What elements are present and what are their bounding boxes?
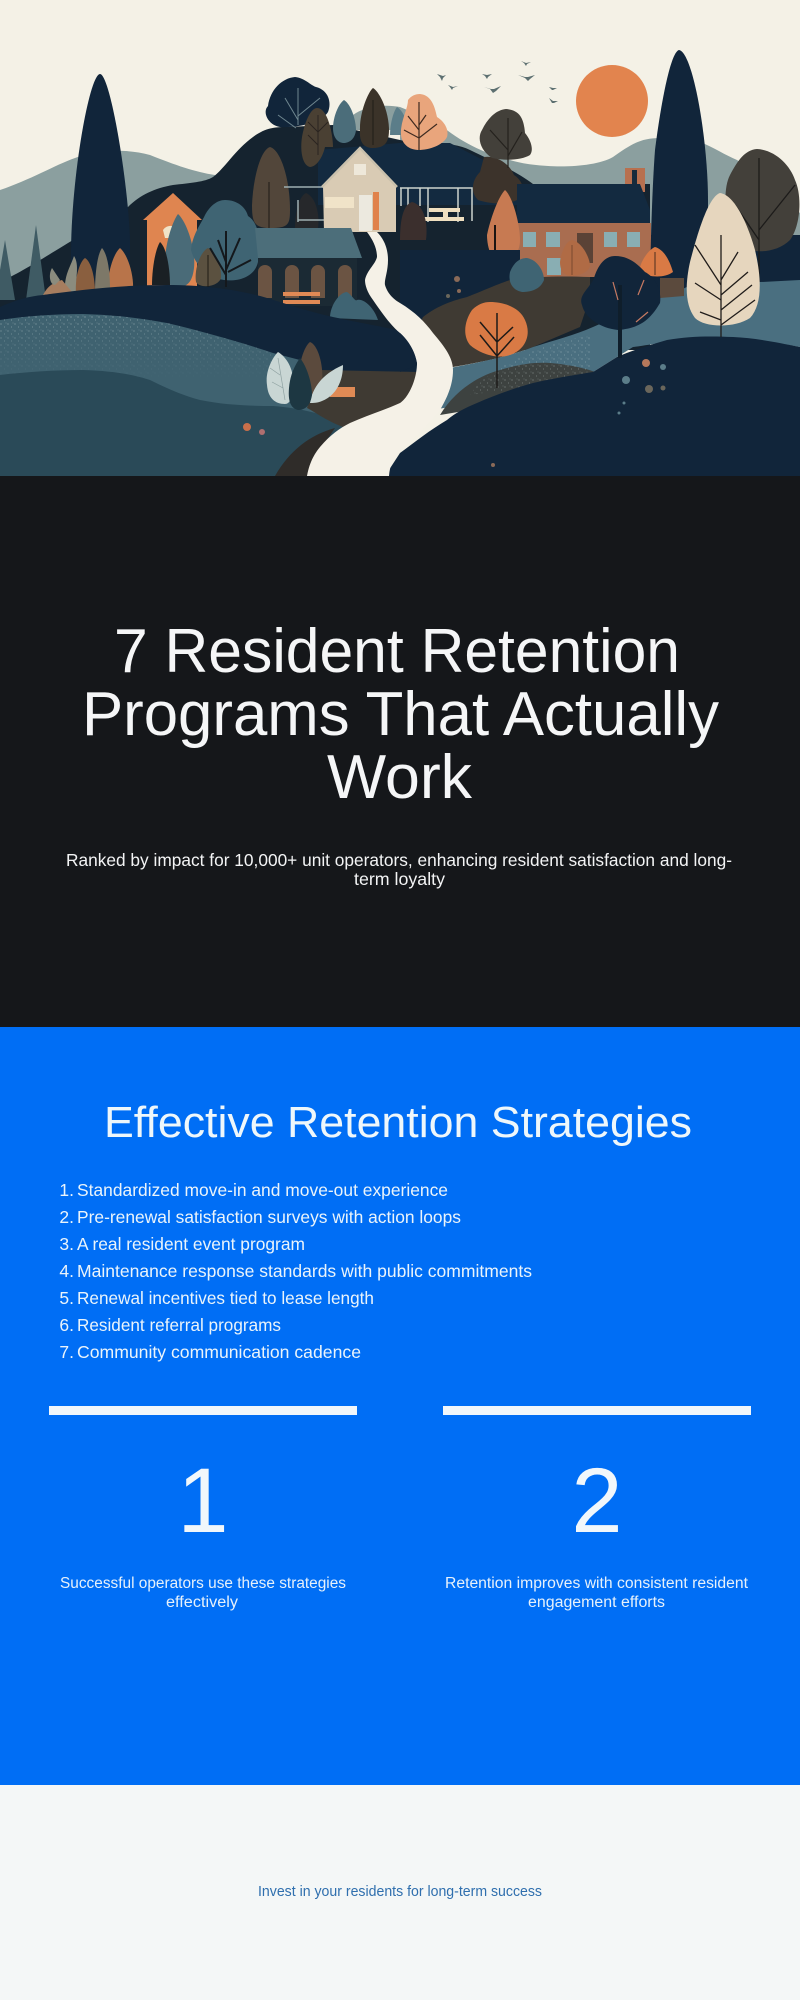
distant hills bbox=[0, 106, 800, 300]
inner dark pocket bbox=[400, 333, 417, 372]
bench orange bbox=[283, 292, 320, 304]
row of autumn trees bbox=[43, 248, 133, 295]
right cypress bbox=[650, 50, 708, 300]
speckled brown band bbox=[440, 363, 595, 415]
back roof bbox=[318, 143, 520, 205]
stat card 1 bbox=[49, 1406, 357, 1611]
stat card 2 bbox=[443, 1406, 751, 1611]
numbered list: 3. bbox=[59, 1234, 74, 1254]
brown bank bbox=[307, 370, 420, 427]
numbered list: 5. bbox=[59, 1288, 74, 1308]
cabin tree dark bbox=[152, 242, 170, 285]
teal roof building bbox=[255, 228, 362, 306]
tree: dark round bbox=[266, 77, 330, 128]
tree: far teal bbox=[390, 107, 408, 135]
numbered list bbox=[59, 1180, 532, 1362]
tree: dark blob below bbox=[473, 157, 523, 204]
stat caption 2 bbox=[445, 1575, 749, 1611]
orange cabin bbox=[143, 193, 202, 290]
subtitle bbox=[66, 850, 732, 889]
bare black tree bbox=[210, 231, 251, 287]
title: 7 Resident Retention bbox=[114, 617, 680, 686]
title bbox=[82, 617, 719, 812]
tree: brown leaf bbox=[301, 108, 333, 167]
plant: pale right leaf bbox=[310, 365, 343, 403]
panel: hero illustration bbox=[0, 0, 800, 476]
dark main hill bbox=[0, 125, 650, 350]
cabin tree teal bbox=[165, 214, 194, 287]
tree: tall brown bbox=[252, 147, 290, 228]
stat caption 2: engagement efforts bbox=[528, 1594, 665, 1611]
orange triangle tree bbox=[487, 190, 520, 280]
house bbox=[322, 148, 397, 232]
brown small tree bbox=[196, 248, 221, 288]
building roof and chimney bbox=[517, 168, 650, 224]
inner brown pocket bbox=[400, 373, 415, 402]
tree: cream bbox=[687, 193, 760, 337]
heading: Effective Retention Strategies bbox=[104, 1098, 692, 1147]
small teal shrub bbox=[510, 258, 544, 292]
numbered list: Maintenance response standards with public commitments bbox=[77, 1261, 532, 1281]
plant: dark leaf bbox=[289, 358, 312, 410]
right navy area beside path bbox=[400, 300, 460, 345]
dark foreground band bbox=[0, 285, 420, 372]
tree: dark brown leaf bbox=[360, 88, 389, 148]
right ground bbox=[650, 235, 800, 305]
tree: dark round foreground bbox=[581, 256, 660, 358]
bench on porch bbox=[424, 208, 464, 221]
panel: effective retention strategies bbox=[0, 1027, 800, 1785]
numbered list: 6. bbox=[59, 1315, 74, 1335]
footer text: Invest in your residents for long-term success bbox=[258, 1884, 542, 1900]
teal band right bbox=[430, 280, 800, 410]
left cypress bbox=[71, 74, 130, 300]
big round teal tree bbox=[191, 200, 260, 280]
background bbox=[0, 476, 800, 1027]
mid teal hill bbox=[0, 314, 320, 476]
numbered list: 7. bbox=[59, 1342, 74, 1362]
panel: footer bbox=[258, 1884, 542, 1900]
stat number 2: 2 bbox=[571, 1450, 623, 1552]
stat caption 1: effectively bbox=[166, 1594, 238, 1611]
peach tree bbox=[401, 94, 448, 150]
small dark-red tree bbox=[400, 202, 427, 240]
subtitle: term loyalty bbox=[354, 869, 445, 889]
numbered list: Standardized move-in and move-out experience bbox=[77, 1180, 448, 1200]
numbered list: 2. bbox=[59, 1207, 74, 1227]
numbered list: Community communication cadence bbox=[77, 1342, 361, 1362]
tree: right dark brown bbox=[725, 149, 799, 290]
plant: brown leaf bbox=[298, 342, 322, 398]
panel: dark title section bbox=[0, 476, 800, 1027]
small dark tree by house bbox=[295, 193, 318, 228]
far left conifers bbox=[0, 225, 46, 300]
numbered list: 4. bbox=[59, 1261, 74, 1281]
sun bbox=[576, 65, 648, 137]
numbered list: Resident referral programs bbox=[77, 1315, 281, 1335]
navy area under buildings bbox=[400, 250, 520, 317]
numbered list: A real resident event program bbox=[77, 1234, 305, 1254]
dark brown speckle patch bbox=[275, 428, 335, 476]
bottom navy hill bbox=[385, 336, 800, 476]
winding path bbox=[307, 232, 453, 476]
stat caption 1: Successful operators use these strategies bbox=[60, 1575, 346, 1592]
orange-brown leaf tree bbox=[560, 240, 590, 276]
stat caption 1 bbox=[60, 1575, 346, 1611]
title: Work bbox=[327, 743, 473, 812]
brown hill right bbox=[417, 276, 590, 372]
background bbox=[0, 1027, 800, 1785]
speckle on teal band bbox=[470, 335, 590, 395]
speckle texture bbox=[0, 316, 272, 374]
stat number 1: 1 bbox=[177, 1450, 229, 1552]
teal shrubs bbox=[330, 292, 378, 320]
birds bbox=[437, 61, 558, 103]
porch right bbox=[400, 188, 472, 222]
plant: pale left leaf bbox=[267, 352, 293, 404]
porch left bbox=[284, 187, 324, 222]
numbered list: Renewal incentives tied to lease length bbox=[77, 1288, 374, 1308]
dots on hill bbox=[446, 276, 666, 467]
mound bbox=[660, 278, 684, 298]
sky bbox=[0, 0, 800, 476]
brick building bbox=[518, 223, 651, 277]
background bbox=[0, 1785, 800, 2000]
title: Programs That Actually bbox=[82, 680, 719, 749]
lower deep teal bbox=[0, 370, 345, 476]
tree: brown top right bbox=[480, 109, 532, 168]
small orange tree bbox=[639, 247, 673, 276]
tree: teal leaf bbox=[333, 100, 356, 143]
stat caption 2: Retention improves with consistent resident bbox=[445, 1575, 749, 1592]
subtitle: Ranked by impact for 10,000+ unit operators, enhancing resident satisfaction and long- bbox=[66, 850, 732, 870]
numbered list: Pre-renewal satisfaction surveys with action loops bbox=[77, 1207, 461, 1227]
numbered list: 1. bbox=[59, 1180, 74, 1200]
tree: orange round bbox=[465, 302, 528, 388]
plant bench bbox=[330, 387, 355, 397]
orange dots left bbox=[243, 423, 265, 435]
